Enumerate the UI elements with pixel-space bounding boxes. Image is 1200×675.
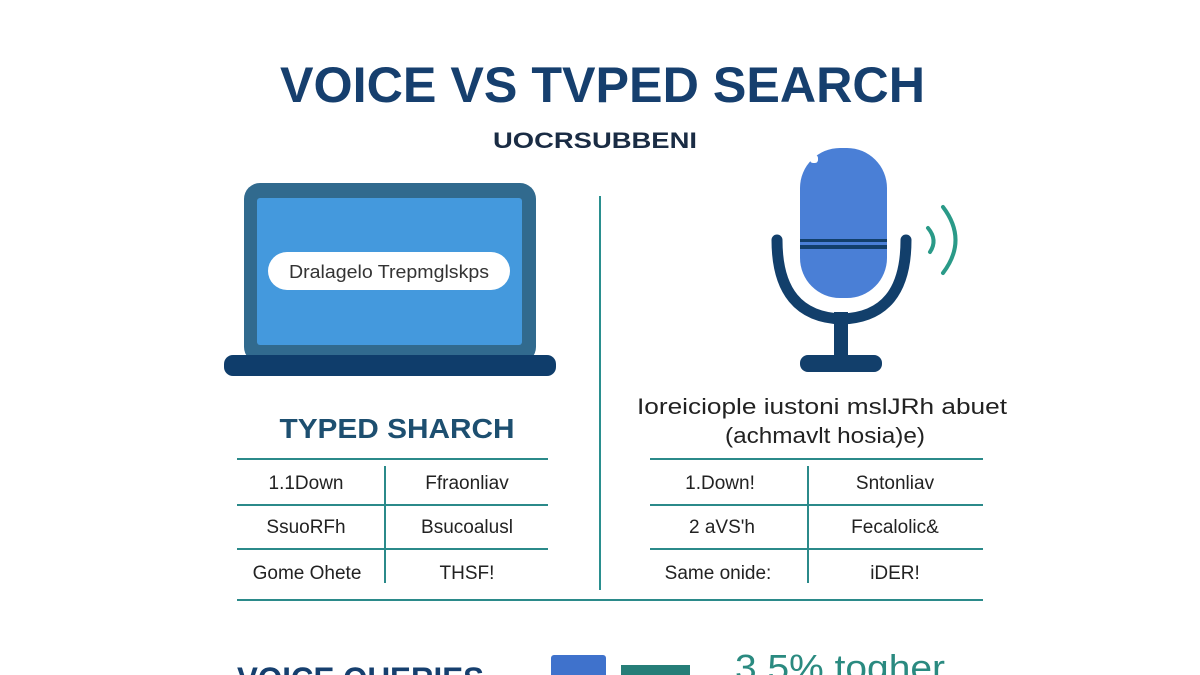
table: typed xyxy=(237,458,548,584)
table: voice: Fecalolic& xyxy=(851,517,939,538)
bar chart xyxy=(551,655,690,675)
table: voice: iDER! xyxy=(870,563,920,584)
table: voice: Same onide: xyxy=(665,563,771,584)
heading: typed search: TYPED SHARCH xyxy=(280,413,514,444)
table: voice: Sntonliav xyxy=(856,473,935,494)
text block: voice description: (achmavlt hosia)e) xyxy=(725,423,925,448)
table: typed: THSF! xyxy=(440,563,494,584)
table: typed: 1.1Down xyxy=(268,473,344,494)
table: typed: Gome Ohete xyxy=(253,563,361,584)
icon: laptop: Dralagelo Trepmglskps xyxy=(289,262,489,282)
divider xyxy=(599,196,601,590)
table: voice: 2 aVS'h xyxy=(689,517,755,538)
table: voice xyxy=(650,458,983,584)
text block: voice description: Ioreiciople iustoni mslJRh abuet xyxy=(637,394,1007,419)
table: typed: Bsucoalusl xyxy=(421,517,513,538)
icon: laptop xyxy=(224,183,556,376)
title: VOICE VS TVPED SEARCH xyxy=(280,57,925,113)
table: typed: Ffraonliav xyxy=(425,473,509,494)
divider bottom xyxy=(237,599,983,601)
subtitle: UOCRSUBBENI xyxy=(493,128,697,153)
icon: microphone xyxy=(777,148,956,372)
table: typed: SsuoRFh xyxy=(266,517,346,538)
text block: voice description xyxy=(637,394,1007,448)
table: voice: 1.Down! xyxy=(685,473,755,494)
